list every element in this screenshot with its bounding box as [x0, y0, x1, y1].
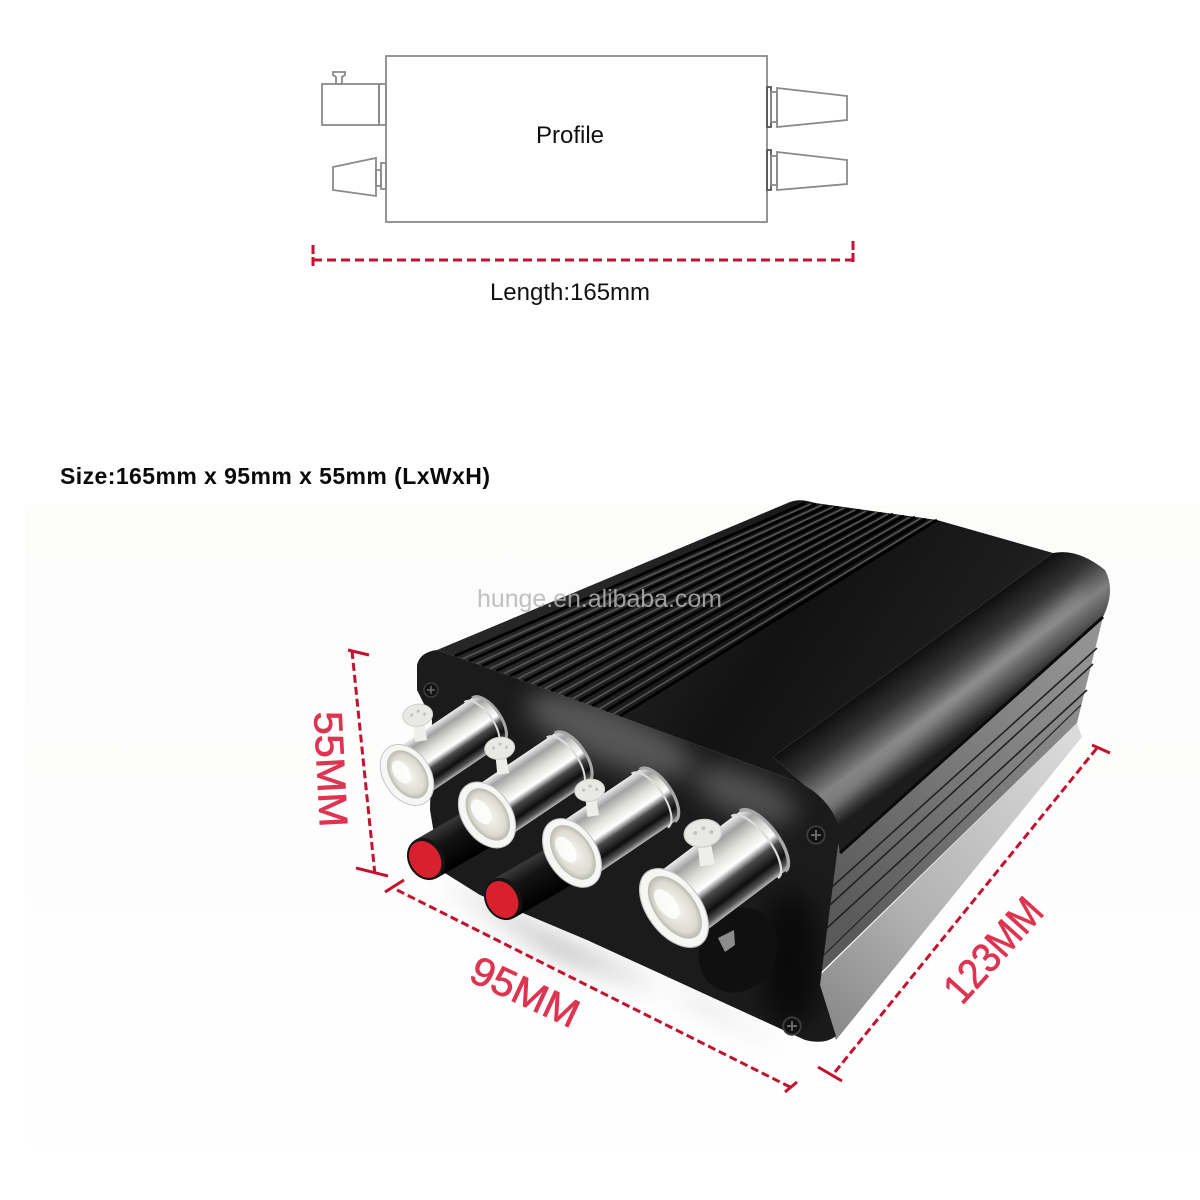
height dimension line: [348, 650, 388, 876]
length label on photo: 123MM: [934, 888, 1052, 1012]
photo backdrop: [25, 505, 1200, 1200]
floor shadow: [440, 880, 790, 1050]
panel screw top left: [424, 683, 438, 697]
power socket: [683, 893, 793, 1007]
front panel: [417, 650, 840, 1042]
enclosure outline: [386, 56, 767, 222]
length label: Length:165mm: [490, 279, 650, 306]
left connector with thumb screw: [322, 72, 386, 125]
panel screw right: [807, 826, 825, 844]
top surface: [437, 500, 1053, 790]
width label: 95MM: [463, 948, 586, 1037]
size heading: Size:165mm x 95mm x 55mm (LxWxH): [60, 463, 490, 489]
panel screw bottom: [783, 1017, 801, 1035]
width dimension line: [385, 880, 797, 1092]
BNC connector 4: [626, 796, 802, 960]
red button 1: [399, 805, 498, 887]
red button 2: [476, 845, 575, 927]
ribbed top: [455, 503, 937, 716]
BNC connector 2: [447, 720, 604, 859]
height label: 55MM: [305, 710, 355, 828]
BNC connector 3: [530, 756, 690, 898]
length dimension line: [313, 241, 853, 267]
BNC connector 1: [369, 686, 517, 815]
rounded shoulder: [773, 552, 1110, 853]
side panel: [808, 617, 1103, 985]
thumb screw 1: [401, 702, 436, 743]
thumb screw 4: [682, 817, 726, 868]
shoulder highlight: [823, 588, 1085, 814]
front panel highlights: [516, 675, 820, 1030]
profile label: Profile: [536, 122, 604, 149]
thumb screw 2: [483, 735, 518, 776]
right lower cone connector: [767, 150, 847, 190]
bottom lip: [810, 723, 1082, 1040]
thumb screw 3: [573, 777, 608, 818]
side top seam: [840, 617, 1103, 853]
left lower cone connector: [333, 158, 386, 196]
right upper cone connector: [767, 87, 847, 127]
product photo: metal enclosure: [369, 500, 1110, 1050]
profile diagram: [322, 56, 847, 222]
length dimension line on photo: [818, 745, 1110, 1081]
side grooves: [824, 648, 1097, 955]
watermark: hunge.en.alibaba.com: [477, 585, 722, 613]
